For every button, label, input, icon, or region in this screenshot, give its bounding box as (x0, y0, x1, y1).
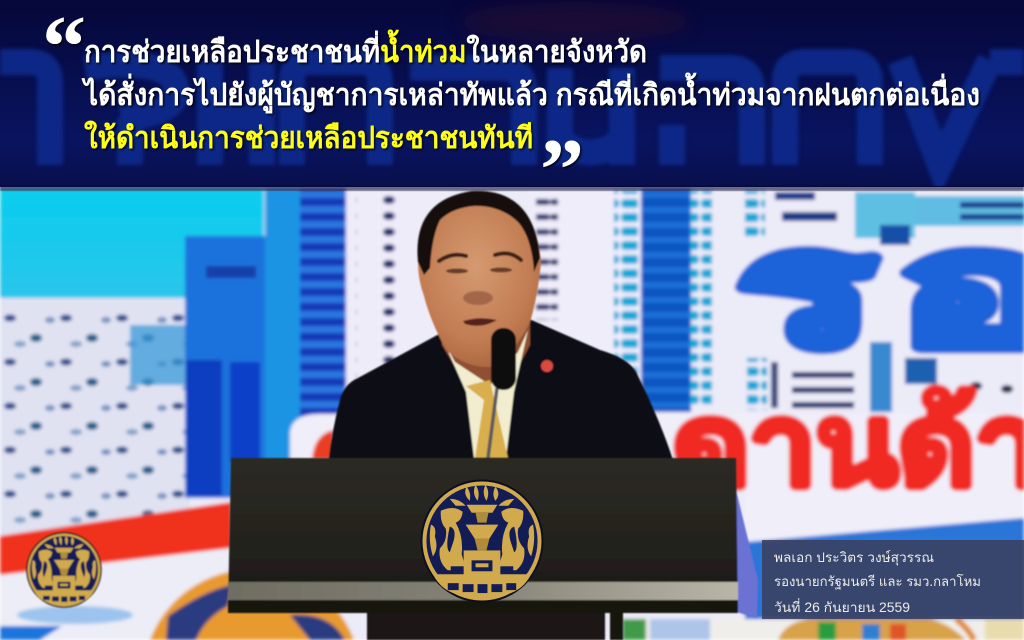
eyes (446, 268, 512, 274)
quote line 2: ได้สั่งการไปยังผู้บัญชาการเหล่าทัพแล้ว กรณีที่เกิดน้ำท่วมจากฝนตกต่อเนื่อง (81, 72, 980, 114)
quote line 1: การช่วยเหลือประชาชนที่น้ำท่วมในหลายจังหวัด (84, 29, 647, 69)
background: red screen lettering: ดานด้า (672, 383, 1024, 508)
shirt collar (443, 330, 528, 458)
speaker at podium (329, 191, 673, 460)
mouth (463, 318, 497, 326)
quote text (42, 0, 980, 219)
band bottom shadow (0, 186, 1024, 191)
suit jacket (329, 318, 673, 460)
top quote band (0, 0, 1024, 187)
caption: date: วันที่ 26 กันยายน 2559 (774, 598, 910, 615)
government seal on podium (420, 479, 544, 603)
caption box (762, 540, 1024, 619)
closing quotation mark: ” (540, 122, 584, 219)
background: big blue screen lettering: อ (897, 202, 1024, 378)
nose (463, 291, 493, 305)
background: banner panel (286, 410, 338, 459)
background: blue lower right (745, 518, 1024, 625)
background: cyan sky (0, 188, 264, 313)
background: big blue screen lettering: ร (738, 202, 874, 378)
caption: title: รองนายกรัฐมนตรี และ รมว.กลาโหม (774, 573, 981, 590)
background: pale building left (0, 298, 190, 538)
podium body (228, 458, 738, 613)
lapel pin (541, 360, 553, 372)
background: big blue screen lettering (732, 244, 1024, 357)
opening quotation mark: “ (42, 0, 86, 96)
photo background: LED screen (0, 187, 1024, 640)
background: red banner left piece (312, 430, 334, 460)
background: food plate lower right (622, 619, 1024, 640)
podium lower rail (228, 600, 738, 613)
quote line 3: ให้ดำเนินการช่วยเหลือประชาชนทันที (84, 120, 533, 155)
background: white tower with dots (355, 194, 397, 378)
podium stand bar (610, 612, 623, 640)
background: orange globe (150, 569, 354, 640)
background: blue tower right (641, 188, 712, 412)
background: dots under blue lettering (747, 342, 1013, 412)
background: blue towers left (185, 188, 346, 498)
background: centre-right white tower (534, 188, 640, 376)
hair (417, 191, 540, 275)
podium silver band (228, 582, 738, 600)
microphone (488, 328, 516, 458)
background: lower left white area (0, 548, 232, 640)
small seal logo bottom-left (26, 532, 102, 608)
podium (228, 458, 758, 640)
gold necktie (466, 380, 508, 458)
brows (439, 253, 521, 261)
caption: name: พลเอก ประวิตร วงษ์สุวรรณ (774, 549, 934, 566)
background: top right cyan and navy dots (745, 190, 1024, 245)
podium side panel (736, 490, 758, 618)
background: red diagonal stripe (0, 502, 232, 575)
neck (440, 320, 530, 392)
head (418, 204, 541, 367)
background: blue patches lower left (0, 606, 133, 640)
podium pedestal (367, 612, 605, 640)
band: faded large letters (0, 60, 1024, 165)
